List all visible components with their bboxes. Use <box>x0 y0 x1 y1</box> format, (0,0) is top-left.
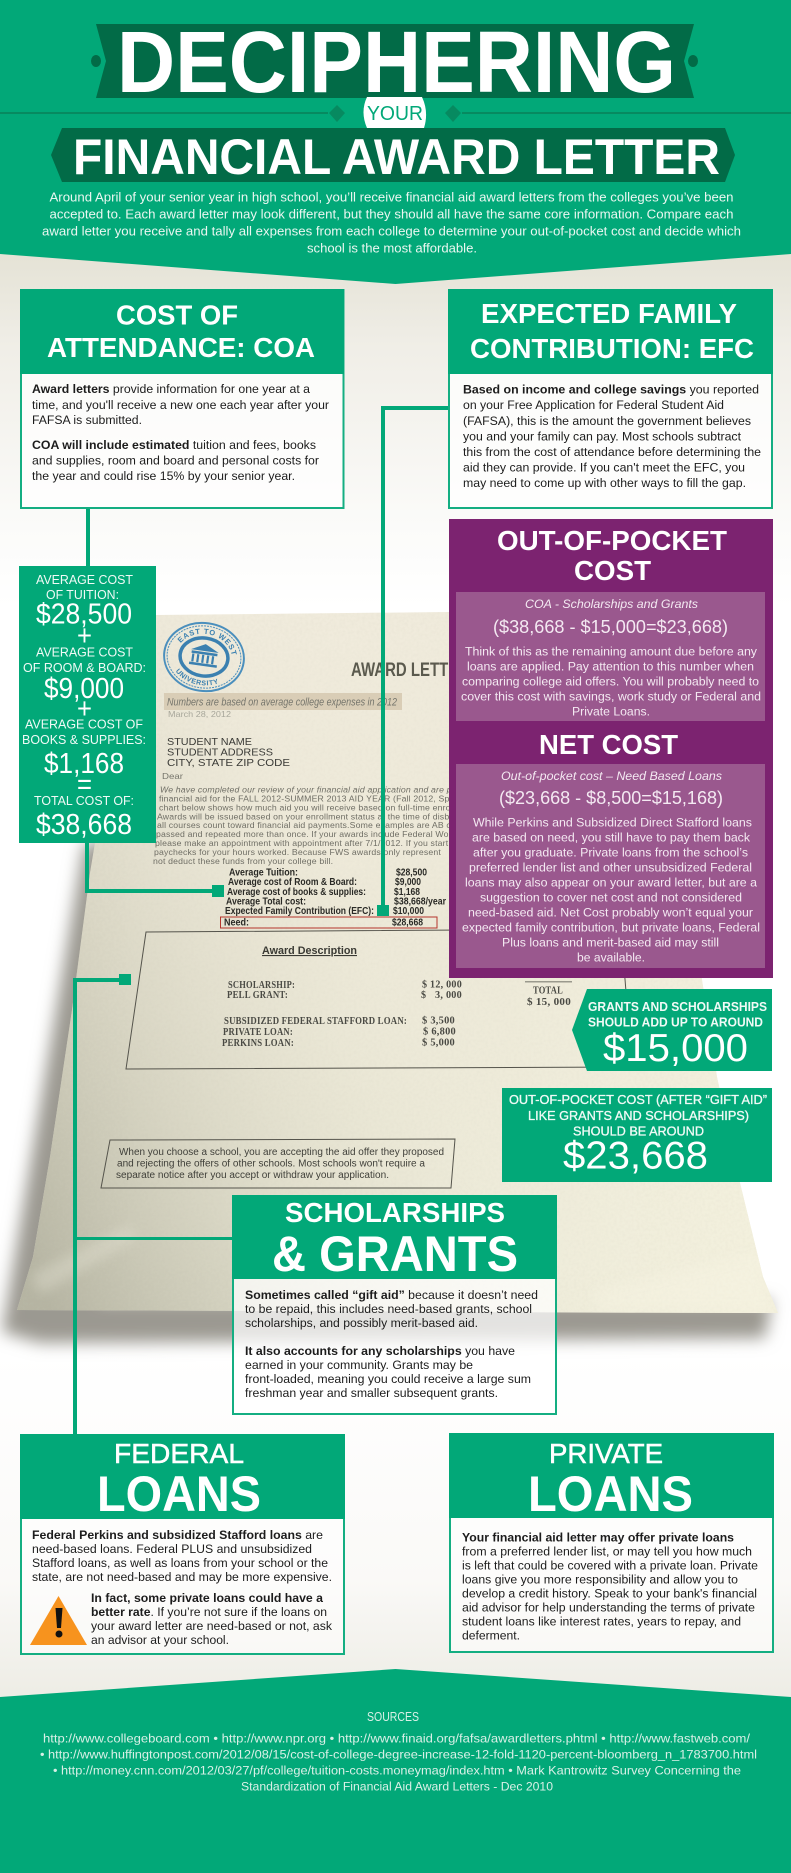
heading: federal loans <box>20 1434 345 1522</box>
body text: deferment. <box>462 1628 520 1642</box>
panel: average cost stats: TOTAL COST OF: <box>34 793 134 808</box>
paper shadow <box>2 843 772 1343</box>
sub-panel: net cost explanation: need-based aid. Net Cost probably won’t equal your <box>468 906 753 920</box>
warning text <box>91 1591 333 1647</box>
panel: federal loans <box>20 1434 345 1654</box>
paper sheet <box>0 600 791 1320</box>
letter address block: Dear <box>162 771 183 781</box>
sub-panel: net cost explanation: suggestion to cover net cost and not considered <box>480 890 742 904</box>
letter paragraph: Awards will be issued based on your enrollment status at the time of disbursement. <box>157 812 489 822</box>
body text: freshman year and smaller subsequent grants. <box>245 1386 498 1400</box>
panel: scholarships and grants <box>232 1195 557 1414</box>
sub-panel: net cost explanation: loans may also appear on your award letter, but are a <box>465 876 757 890</box>
award description box: $ 5,000 <box>422 1038 455 1048</box>
panel: cost of attendance <box>20 289 344 508</box>
letter heading: AWARD LETTER <box>351 660 469 681</box>
heading: EFC: EXPECTED FAMILY <box>481 298 737 329</box>
panel: average cost stats: AVERAGE COST OF <box>25 716 143 732</box>
letter cost table: $28,500 <box>396 868 427 878</box>
sources <box>40 1709 757 1794</box>
sub-panel: net cost explanation: Out-of-pocket cost – Need Based Loans <box>501 769 722 783</box>
acceptance notice box <box>101 1139 455 1188</box>
body text: to be repaid, this includes need-based grants, school <box>245 1302 532 1316</box>
panel: average cost stats: = <box>77 769 92 801</box>
panel: private loans <box>449 1433 774 1652</box>
sub-panel: out-of-pocket explanation: cover this cost with savings, work study or Federal and <box>461 690 761 704</box>
letter cost table <box>220 868 446 928</box>
body text: Based on income and college savings you reported <box>463 382 759 396</box>
body text: develop a credit history. Speak to your bank's financial <box>462 1586 757 1600</box>
sources: • http://www.huffingtonpost.com/2012/08/15/cost-of-college-degree-increase-12-fold-1120-percent-bloomberg_n_1783700.html <box>40 1748 757 1762</box>
award description box: $ 6,800 <box>423 1026 456 1038</box>
callout: out-of-pocket total: $23,668 <box>563 1134 708 1178</box>
title banner: Deciphering: DECIPHERING <box>117 14 676 111</box>
sub-panel: out-of-pocket explanation <box>456 592 765 721</box>
body text: FAFSA is submitted. <box>32 413 142 427</box>
sub-panel: net cost explanation: While Perkins and Subsidized Direct Stafford loans <box>473 816 752 830</box>
heading: net cost: NET COST <box>539 729 678 760</box>
heading: EFC: CONTRIBUTION: EFC <box>470 333 754 364</box>
title divider: your <box>0 97 791 128</box>
panel: average cost stats: OF TUITION: <box>46 587 119 602</box>
heading: scholarships and grants <box>232 1195 557 1282</box>
footer band <box>0 1669 791 1873</box>
body text: Award letters provide information for one year at a <box>32 382 310 396</box>
panel: average cost stats: AVERAGE COST <box>36 572 133 587</box>
warning text: your award letter are need-based or not, ask <box>91 1619 333 1633</box>
header band <box>0 0 791 284</box>
panel: average cost stats: $9,000 <box>44 673 124 705</box>
letter address block: March 28, 2012 <box>168 709 231 719</box>
panel: out-of-pocket and net cost <box>449 519 773 978</box>
connector: aid description to loans and grants <box>75 974 234 1436</box>
sub-panel: out-of-pocket explanation: Think of this as the remaining amount due before any <box>465 644 758 658</box>
heading: cost of attendance <box>20 289 344 374</box>
sub-panel: net cost explanation: be available. <box>577 950 645 964</box>
letter address block: STUDENT ADDRESS <box>167 748 273 758</box>
letter cost table: $9,000 <box>395 877 421 888</box>
panel: average cost stats: $1,168 <box>44 748 124 780</box>
award description box: PELL GRANT: <box>227 990 288 1001</box>
body text: on your Free Application for Federal Student Aid <box>463 398 724 412</box>
body text <box>32 382 329 483</box>
callout: grants and scholarships total: SHOULD ADD UP TO AROUND <box>588 1014 763 1030</box>
award description box: PRIVATE LOAN: <box>223 1027 293 1038</box>
award description box: PERKINS LOAN: <box>222 1038 294 1049</box>
warning text: an advisor at your school. <box>91 1633 229 1647</box>
letter paragraph: please make an appointment with appointment after 7/1/2012. If you start <box>155 838 449 848</box>
sources: Standardization of Financial Aid Award Letters - Dec 2010 <box>241 1780 553 1794</box>
body text: time, and you'll receive a new one each year after your <box>32 398 329 412</box>
warning text: better rate. If you’re not sure if the loans on <box>91 1605 327 1619</box>
callout: grants and scholarships total: $15,000 <box>603 1027 748 1070</box>
sub-panel: out-of-pocket explanation: loans are applied. Pay attention to this number when <box>467 660 754 674</box>
heading: scholarships and grants: & GRANTS <box>272 1226 518 1282</box>
panel: average cost stats: $28,500 <box>36 598 132 630</box>
sub-panel: net cost explanation: after you graduate. Private loans from the school’s <box>473 846 748 860</box>
body text <box>463 382 761 490</box>
letter paragraph: all courses count toward financial aid payments.Some examples are AB credits and <box>157 820 491 830</box>
sources: SOURCES <box>367 1709 419 1724</box>
letter paragraph: financial aid for the FALL 2012-SUMMER 2013 AID YEAR (Fall 2012, Spring 2013). The <box>159 794 511 804</box>
letter cost table: $28,668 <box>392 918 423 928</box>
body text <box>462 1530 758 1642</box>
award description box: 3, 000 <box>435 990 462 1001</box>
letter paragraph: passed and repeated more than once. If your awards include Federal Work Study <box>156 829 482 839</box>
heading: private loans: LOANS <box>528 1466 693 1522</box>
callout: grants and scholarships total: GRANTS AND SCHOLARSHIPS <box>588 999 767 1014</box>
sub-panel: out-of-pocket explanation: COA - Scholarships and Grants <box>525 597 698 611</box>
university seal <box>163 622 245 692</box>
university seal: EAST TO WEST <box>177 628 237 654</box>
panel: average cost stats: + <box>77 693 92 725</box>
panel: average cost stats: BOOKS & SUPPLIES: <box>22 732 146 747</box>
warning text: In fact, some private loans could have a <box>91 1591 323 1605</box>
body text: front-loaded, meaning you could receive a large sum <box>245 1372 531 1386</box>
callout: out-of-pocket total: LIKE GRANTS AND SCHOLARSHIPS) <box>528 1109 749 1123</box>
body text: you and your family can pay. Most schools subtract <box>463 430 742 444</box>
letter cost table: Expected Family Contribution (EFC): <box>225 906 374 917</box>
heading: out-of-pocket cost <box>497 525 727 586</box>
body text: may need to come up with other ways to fill the gap. <box>463 476 746 490</box>
icon: warning triangle <box>30 1596 87 1645</box>
callout: out-of-pocket total: OUT-OF-POCKET COST (AFTER “GIFT AID” <box>509 1093 767 1107</box>
award description box: $ 12, 000 <box>422 980 462 990</box>
heading: scholarships and grants: SCHOLARSHIPS <box>285 1197 505 1228</box>
letter cost table: Need: <box>224 918 249 928</box>
sub-panel: out-of-pocket explanation: Private Loans. <box>572 704 650 718</box>
callout: out-of-pocket total <box>502 1088 772 1182</box>
letter address block: CITY, STATE ZIP CODE <box>167 758 290 769</box>
letter cost table: $1,168 <box>394 887 420 898</box>
heading: out-of-pocket cost: OUT-OF-POCKET <box>497 525 727 556</box>
sub-panel: net cost explanation: ($23,668 - $8,500=$15,168) <box>499 788 723 808</box>
heading: cost of attendance: COST OF <box>116 300 238 330</box>
body text: this from the cost of attendance before determining the <box>463 445 761 459</box>
acceptance notice box: When you choose a school, you are accepting the aid offer they proposed <box>119 1147 444 1158</box>
body text: and supplies, room and board and personal costs for <box>32 454 319 468</box>
heading: private loans <box>449 1433 774 1522</box>
callout: out-of-pocket total: SHOULD BE AROUND <box>573 1124 704 1138</box>
highlighted note: Numbers are based on average college expenses in 2012 <box>167 696 397 708</box>
body text: loans give you more responsibility and allow you to <box>462 1572 738 1586</box>
title banner: Financial Award Letter: FINANCIAL AWARD LETTER <box>73 129 720 185</box>
award description box: $ 15, 000 <box>527 997 571 1008</box>
body text <box>245 1288 538 1400</box>
heading: federal loans: FEDERAL <box>114 1438 244 1469</box>
intro paragraph: school is the most affordable. <box>307 242 477 256</box>
letter address block: STUDENT NAME <box>167 737 252 748</box>
university seal: UNIVERSITY <box>176 668 218 686</box>
award description box: TOTAL <box>533 986 563 996</box>
body text: aid advisor for help understanding the terms of private <box>462 1600 755 1614</box>
letter paragraph: We have completed our review of your financial aid application and are pleased to offer <box>160 784 510 794</box>
panel: average cost stats: OF ROOM & BOARD: <box>23 660 146 675</box>
connector: EFC to table <box>377 408 450 916</box>
callout: grants and scholarships total <box>572 989 772 1071</box>
connector: COA to stats <box>86 509 90 567</box>
intro paragraph <box>42 190 741 256</box>
body text <box>32 1528 332 1584</box>
heading: private loans: PRIVATE <box>549 1438 663 1469</box>
letter cost table: Average Total cost: <box>226 896 306 908</box>
letter cost table: Average Tuition: <box>229 868 298 878</box>
body text: COA will include estimated tuition and fees, books <box>32 438 316 452</box>
sub-panel: net cost explanation: Plus loans and merit-based aid may still <box>502 936 719 950</box>
heading: out-of-pocket cost: COST <box>574 555 651 586</box>
heading: federal loans: LOANS <box>97 1466 261 1522</box>
title divider: your: YOUR <box>367 103 423 125</box>
letter paragraph: paychecks for your hours worked. Because FWS awards only represent <box>154 847 441 857</box>
panel: average cost stats: AVERAGE COST <box>36 644 133 660</box>
letter cost table: $38,668/year <box>394 896 446 908</box>
sub-panel: out-of-pocket explanation: ($38,668 - $15,000=$23,668) <box>493 617 728 637</box>
letter cost table: Average cost of books & supplies: <box>227 887 366 898</box>
award description box: SUBSIDIZED FEDERAL STAFFORD LOAN: <box>224 1016 407 1027</box>
body text: state, are not need-based and may be more expensive. <box>32 1570 332 1584</box>
award description box: $ 3,500 <box>422 1016 455 1026</box>
panel: average cost stats <box>19 566 156 843</box>
award description box <box>126 929 632 1069</box>
award description box: SCHOLARSHIP: <box>228 980 295 991</box>
sources: • http://money.cnn.com/2012/03/27/pf/college/tuition-costs.moneymag/index.htm • Mark Kantrowitz Survey Concerning the <box>53 1764 741 1778</box>
body text: It also accounts for any scholarships you have <box>245 1344 515 1358</box>
body text: Stafford loans, as well as loans from your school or the <box>32 1556 328 1570</box>
body text: earned in your community. Grants may be <box>245 1358 473 1372</box>
sub-panel: net cost explanation <box>456 764 765 968</box>
body text: Your financial aid letter may offer private loans <box>462 1530 734 1544</box>
sub-panel: out-of-pocket explanation: comparing college aid offers. You will probably need to <box>462 674 759 688</box>
body text: scholarships, and possibly merit-based aid. <box>245 1316 478 1330</box>
body text: aid they can provide. If you can't meet the EFC, you <box>463 460 745 474</box>
body text: (FAFSA), this is the amount the government believes <box>463 414 751 428</box>
intro paragraph: award letter you receive and tally all expenses from each college to determine your out-of-pocket cost and decide which <box>42 224 741 238</box>
panel: average cost stats: + <box>77 620 92 652</box>
body text: is left that could be covered with a private loan. Private <box>462 1558 758 1572</box>
body text: Sometimes called “gift aid” because it doesn’t need <box>245 1288 538 1302</box>
body text: Federal Perkins and subsidized Stafford loans are <box>32 1528 323 1542</box>
heading: cost of attendance: ATTENDANCE: COA <box>47 332 315 363</box>
connector: stats to award table <box>87 843 224 897</box>
letter address block <box>162 709 290 781</box>
panel: expected family contribution <box>448 289 773 508</box>
letter paragraph: not deduct these funds from your college bill. <box>153 856 333 866</box>
letter paragraph <box>153 784 511 866</box>
body text: need-based loans. Federal PLUS and unsubsidized <box>32 1542 312 1556</box>
highlighted note <box>164 693 402 710</box>
letter paragraph: chart below shows how much aid you will receive based on full-time enrollment. Your <box>159 802 498 812</box>
body text: the year and could rise 15% by your senior year. <box>32 469 295 483</box>
body text: from a preferred lender list, or may tell you how much <box>462 1544 752 1558</box>
panel: average cost stats: $38,668 <box>36 809 132 841</box>
sub-panel: net cost explanation: expected family contribution, but private loans, Federal <box>462 920 760 934</box>
award letter photo <box>17 612 778 1313</box>
sub-panel: net cost explanation: preferred lender list and other unsubsidized Federal <box>469 860 752 874</box>
sources: http://www.collegeboard.com • http://www.npr.org • http://www.finaid.org/fafsa/awardletters.phtml • http://www.fastweb.com/ <box>43 1732 751 1746</box>
acceptance notice box: and rejecting the offers of other schools. Most schools won't require a <box>117 1158 425 1170</box>
body text: student loans like interest rates, years to repay, and <box>462 1614 741 1628</box>
sub-panel: net cost explanation: are based on need, you still have to pay them back <box>472 830 751 844</box>
intro paragraph: Around April of your senior year in high school, you’ll receive financial aid award letters from the colleges you’ve been <box>50 190 734 204</box>
award description box: Award Description <box>262 945 357 957</box>
award description box: $ <box>421 990 426 1001</box>
heading: EFC <box>448 289 773 374</box>
acceptance notice box: separate notice after you accept or withdraw your application. <box>116 1170 389 1181</box>
letter cost table: $10,000 <box>393 906 424 917</box>
intro paragraph: accepted to. Each award letter may look different, but they should all have the same core information. Compare each <box>50 208 734 222</box>
letter cost table: Average cost of Room & Board: <box>228 877 357 888</box>
